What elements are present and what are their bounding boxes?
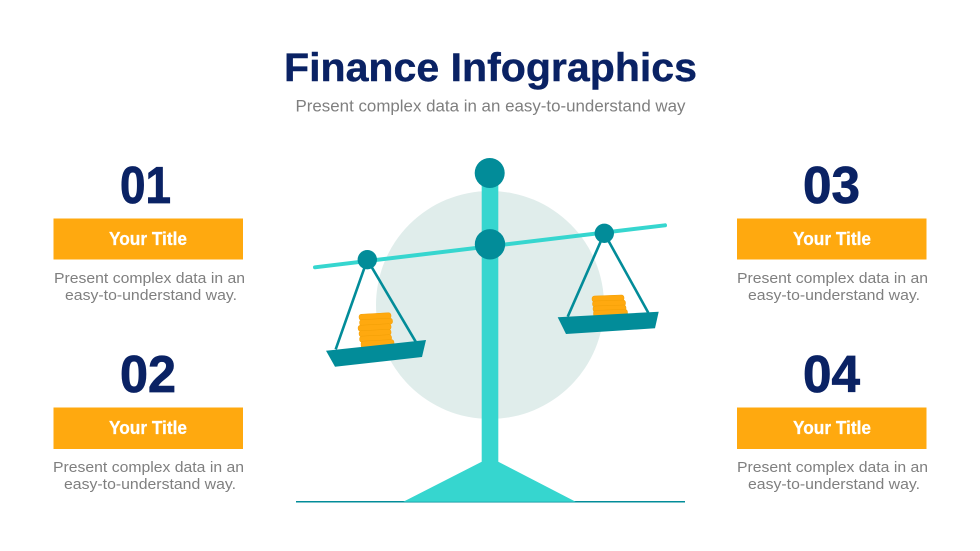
description 03: Present complex data in an xyxy=(737,270,928,287)
title bar 04 xyxy=(737,408,926,449)
ground line xyxy=(296,501,685,502)
title bar 02 xyxy=(54,408,243,449)
title bar 01 xyxy=(54,218,243,260)
description 02 xyxy=(53,459,244,493)
top knob xyxy=(475,158,505,188)
title: Finance Infographics xyxy=(284,46,697,90)
right pan xyxy=(558,312,659,334)
panel: item 01 xyxy=(54,157,245,304)
right beam knob xyxy=(595,224,614,243)
left pan xyxy=(326,340,426,367)
description 04: Present complex data in an xyxy=(737,459,928,476)
icon: balance scale xyxy=(296,158,685,502)
right coin stack xyxy=(592,295,628,318)
description 03: easy-to-understand way. xyxy=(748,287,920,304)
right pan strings xyxy=(568,233,648,317)
title bar 02: Your Title xyxy=(109,418,187,438)
description 02: Present complex data in an xyxy=(53,459,244,476)
description 03 xyxy=(737,270,928,304)
panel: item 03 xyxy=(737,157,928,304)
description 01: easy-to-understand way. xyxy=(65,287,237,304)
description 02: easy-to-understand way. xyxy=(64,476,236,493)
subtitle: Present complex data in an easy-to-understand way xyxy=(296,98,686,116)
centre pivot xyxy=(475,229,505,260)
description 01: Present complex data in an xyxy=(54,270,245,287)
title bar 01: Your Title xyxy=(109,229,187,249)
background circle xyxy=(376,191,604,419)
title bar 03 xyxy=(737,218,926,260)
left beam knob xyxy=(358,250,377,269)
description 01 xyxy=(54,270,245,304)
number 03: 03 xyxy=(803,157,860,215)
number 01: 01 xyxy=(120,157,171,215)
left coin stack xyxy=(358,313,394,348)
number 04: 04 xyxy=(803,346,860,404)
number 02: 02 xyxy=(120,346,176,404)
panel: item 02 xyxy=(53,346,244,493)
scale beam xyxy=(315,225,665,267)
scale pole and base xyxy=(403,173,576,502)
title bar 04: Your Title xyxy=(793,418,871,438)
panel: item 04 xyxy=(737,346,928,493)
left pan strings xyxy=(336,260,416,349)
description 04 xyxy=(737,459,928,493)
description 04: easy-to-understand way. xyxy=(748,476,920,493)
title bar 03: Your Title xyxy=(793,229,871,249)
